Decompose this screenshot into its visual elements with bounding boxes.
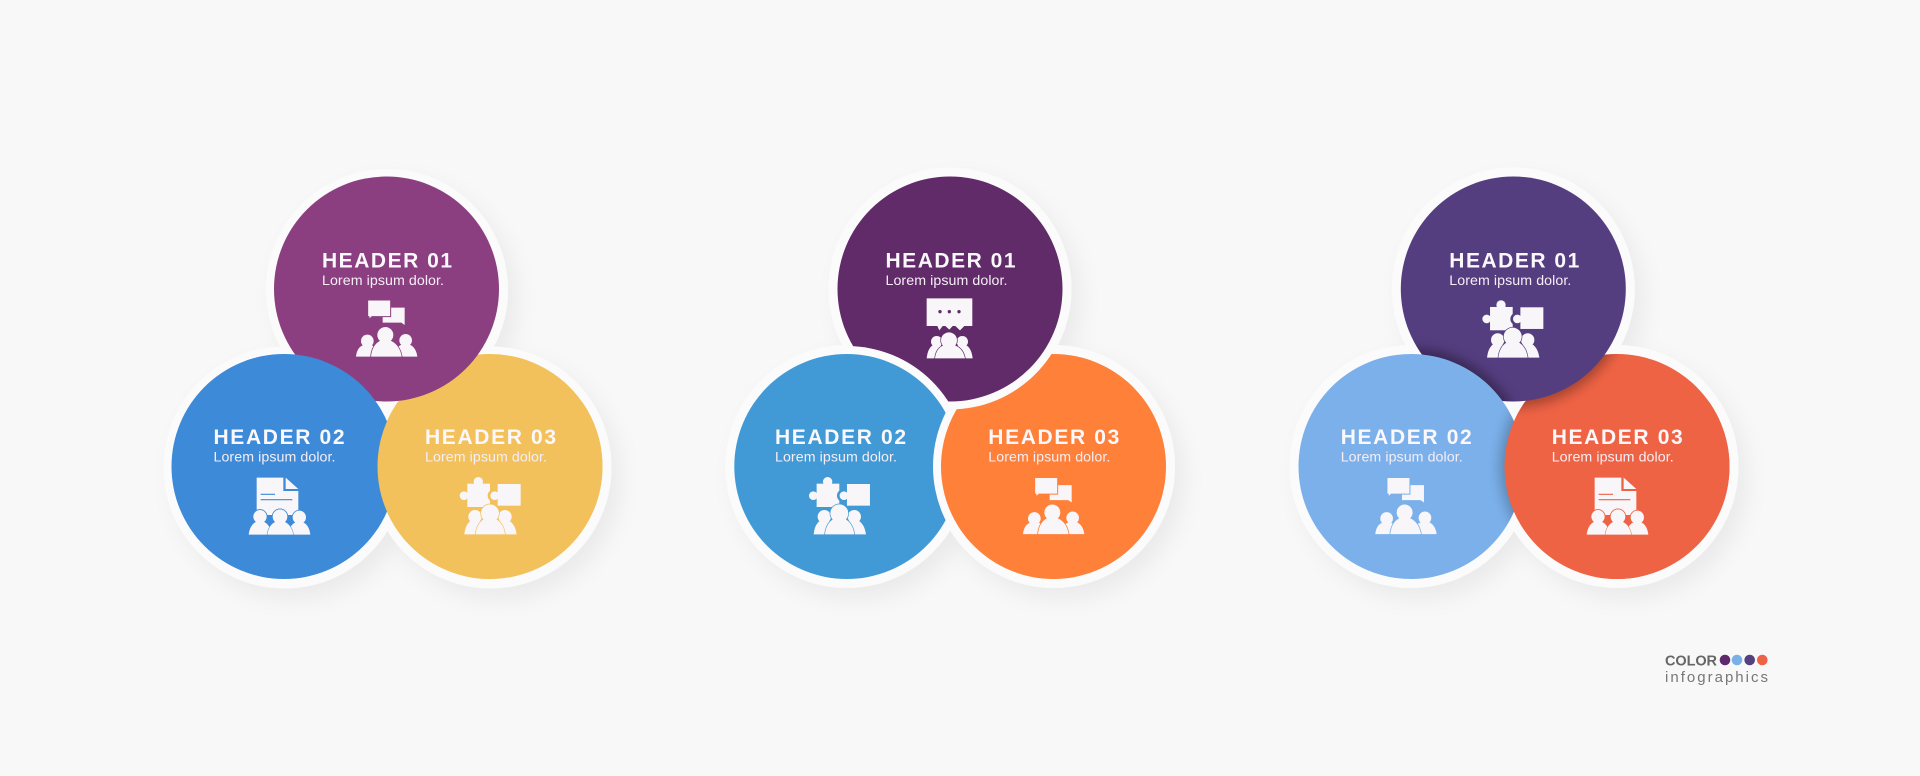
text: lorem 01: Lorem ipsum dolor. [1449,273,1571,289]
text: lorem 02: Lorem ipsum dolor. [1341,450,1463,466]
logo colour dots [1720,655,1768,665]
white circle rings set 1 [164,169,612,588]
text: lorem 02: Lorem ipsum dolor. [775,450,897,466]
overlapping ringed discs set 2 [726,168,1174,587]
overlapping colour discs set 1 [172,176,602,579]
icon: people with chat bubbles [1375,477,1437,534]
icon: document and team [249,478,310,535]
text: lorem 01: Lorem ipsum dolor. [886,273,1008,289]
base rings with shadow set 2 [725,168,1175,588]
heading: header 02: HEADER 02 [775,426,906,449]
logo: color infographics [1665,654,1768,686]
icon: document and team [1587,478,1648,535]
heading: header 02: HEADER 02 [1341,426,1472,449]
text: lorem 02: Lorem ipsum dolor. [214,450,336,466]
icon: puzzle and team [460,477,521,534]
text: lorem 03: Lorem ipsum dolor. [1552,450,1674,466]
icon: puzzle and team [809,477,870,534]
logo word: COLOR: COLOR [1665,654,1718,670]
heading: header 01: HEADER 01 [322,250,452,272]
text: lorem 01: Lorem ipsum dolor. [322,273,444,289]
icon: people with chat bubbles [356,300,417,357]
white circle rings set 3 [1290,168,1738,588]
overlapping discs with inner shadows set 3 [1294,173,1732,582]
icon: people under speech bubble [927,298,973,358]
logo word: infographics: infographics [1665,669,1768,686]
icon: people with chat bubbles [1023,477,1084,534]
heading: header 01: HEADER 01 [886,250,1016,272]
text: lorem 03: Lorem ipsum dolor. [988,450,1110,466]
heading: header 02: HEADER 02 [214,426,344,449]
heading: header 03: HEADER 03 [988,426,1119,449]
panel: infographic set 2 [725,168,1175,588]
panel: infographic set 1 [164,169,612,588]
heading: header 03: HEADER 03 [425,426,556,449]
heading: header 03: HEADER 03 [1552,426,1683,449]
panel: infographic set 3 [1290,168,1738,588]
text: lorem 03: Lorem ipsum dolor. [425,450,547,466]
heading: header 01: HEADER 01 [1449,250,1580,272]
icon: puzzle and team [1482,300,1543,358]
